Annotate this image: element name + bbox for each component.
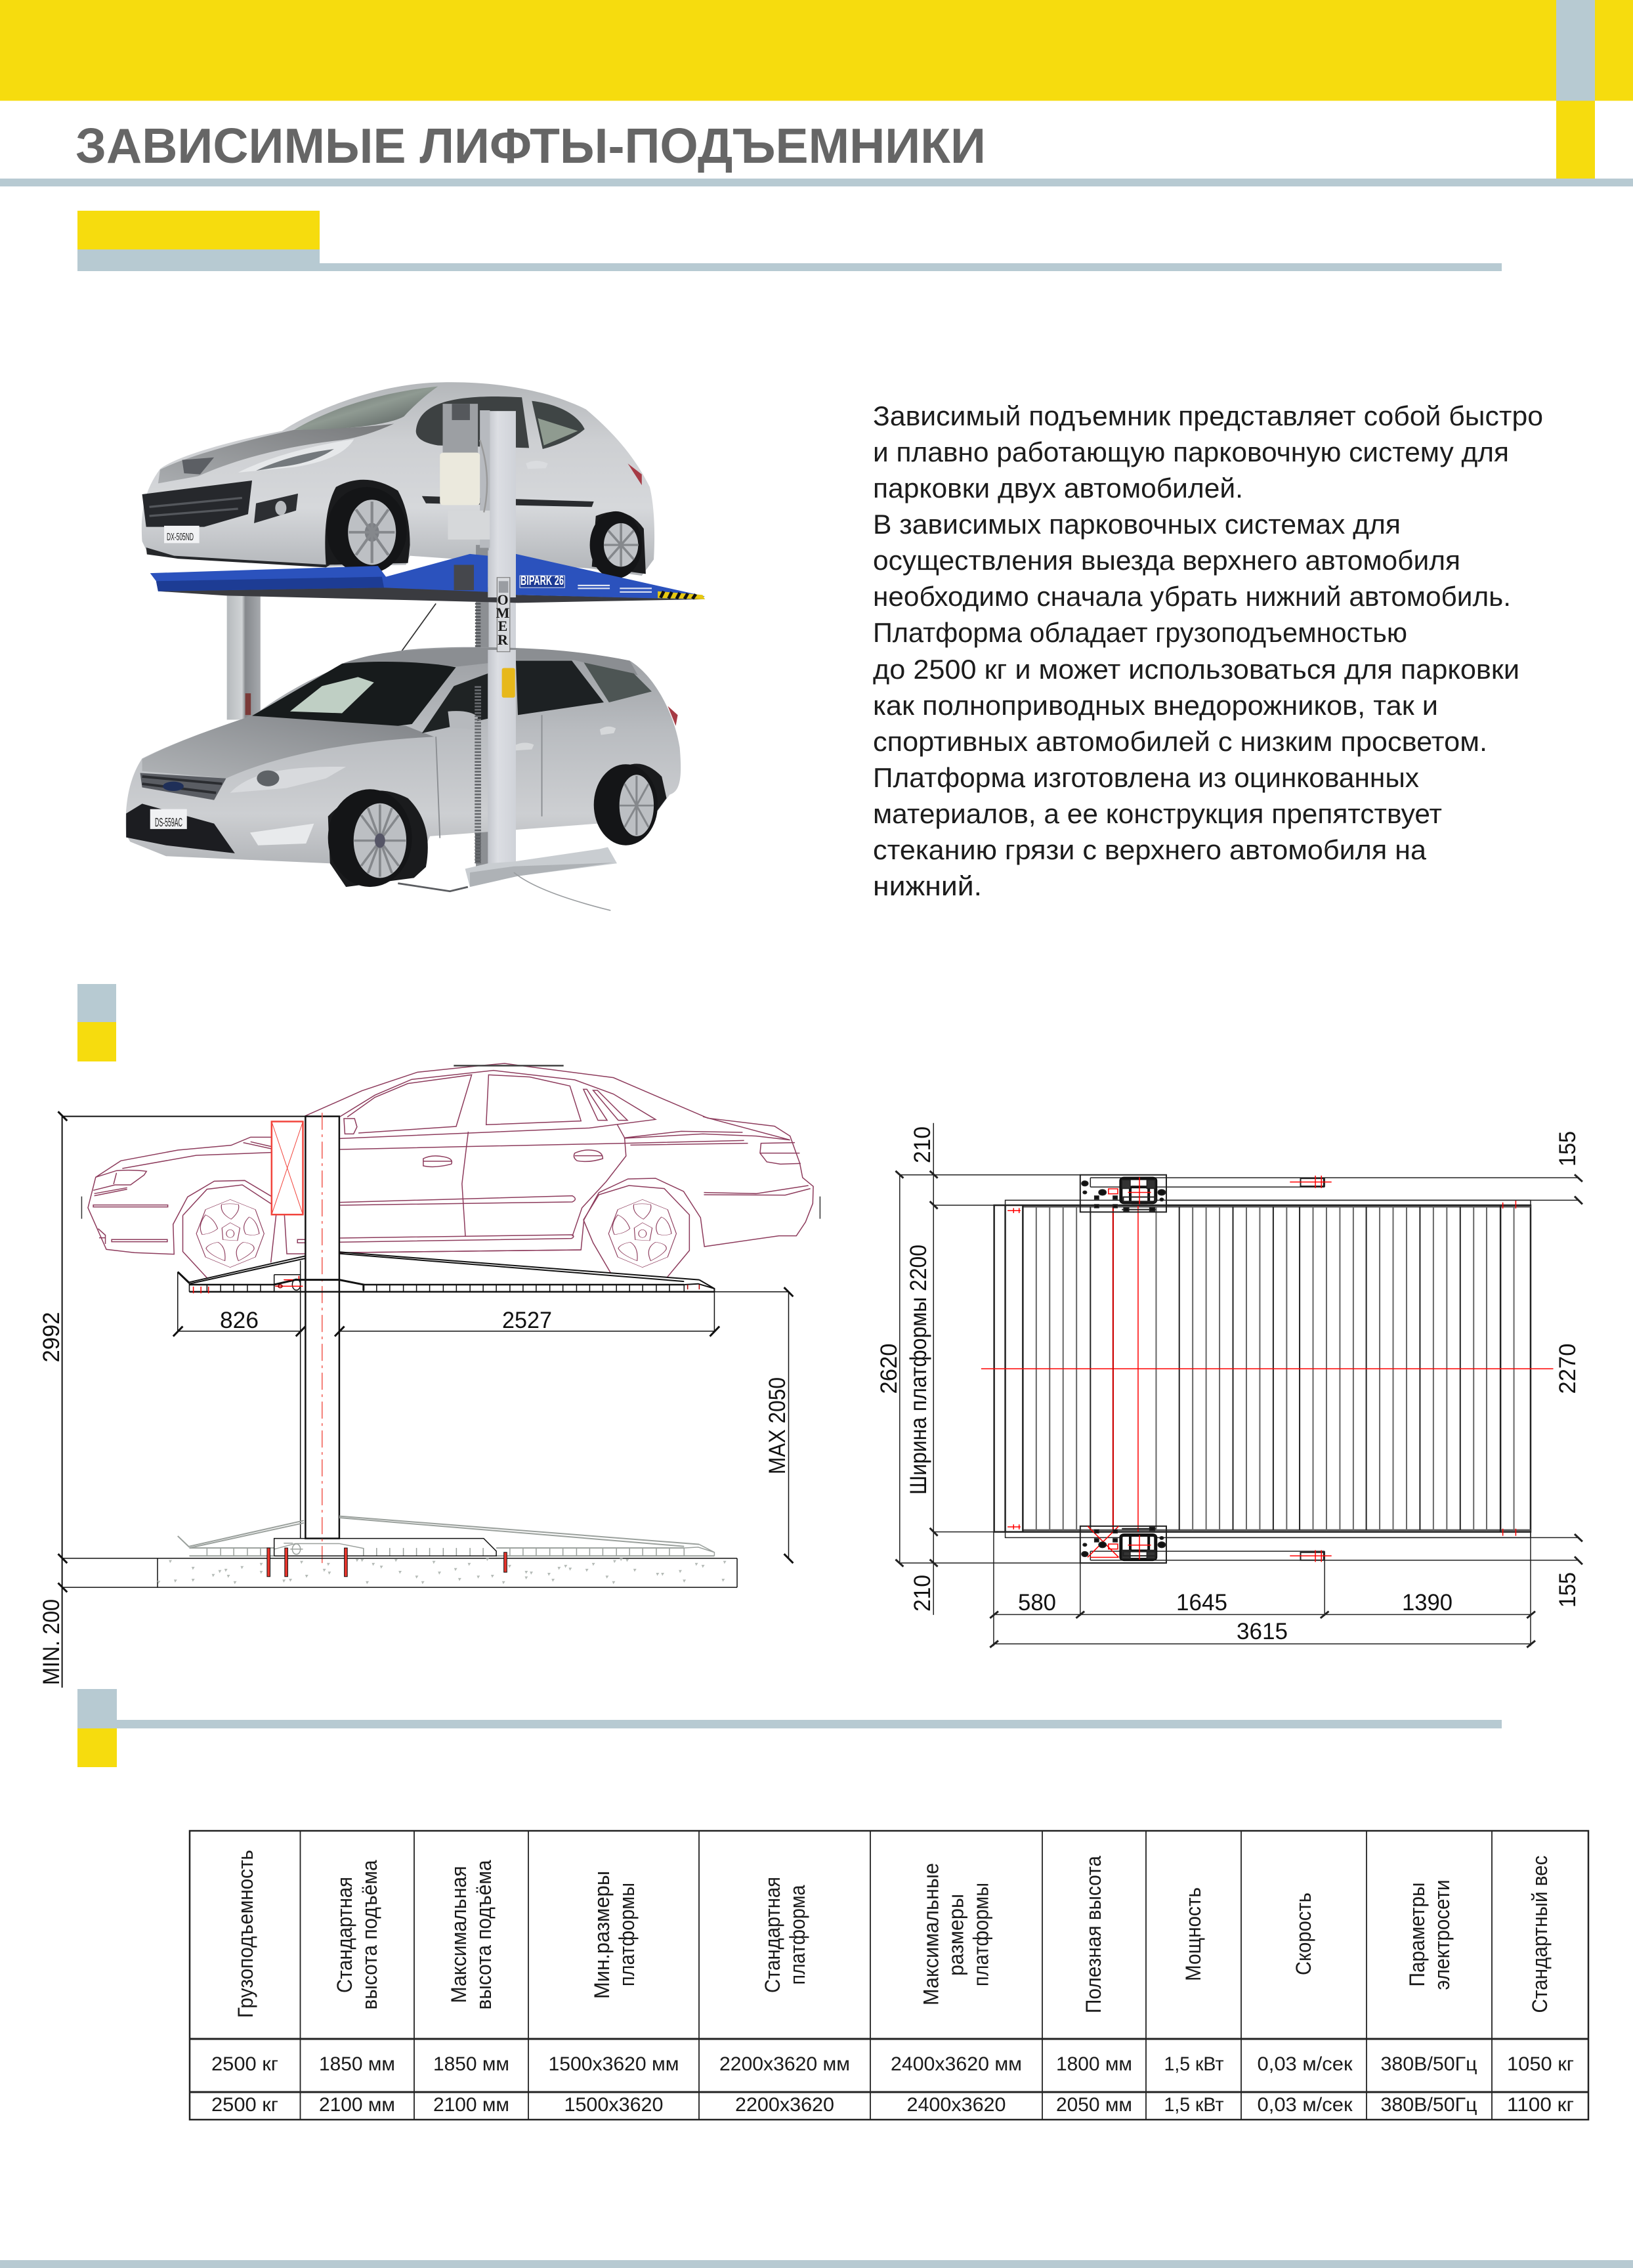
dimension: 2992: 2992: [39, 1312, 64, 1363]
table header labels: платформы: [615, 1883, 639, 1986]
dimension: 826: 826: [220, 1308, 259, 1333]
table header labels: платформа: [786, 1885, 809, 1985]
hoisting guard: [272, 1121, 303, 1214]
concrete aggregate: [158, 1558, 726, 1584]
top bracket: [1080, 1175, 1578, 1212]
section marker: drawings: [77, 984, 116, 1061]
table grid: [190, 1831, 1588, 2120]
description text: как полноприводных внедорожников, так и: [873, 690, 1438, 721]
table row 2: 2400x3620: [907, 2094, 1006, 2116]
table row 2: 2050 мм: [1056, 2094, 1132, 2116]
photo lettering: BIPARK 26: [520, 574, 564, 588]
dimension lines: [62, 1117, 305, 1688]
dimension: 155 bottom: 155: [1555, 1572, 1580, 1608]
photo: two-car parking lift: DS-559AC: [155, 816, 182, 829]
description text: осуществления выезда верхнего автомобиля: [873, 545, 1460, 576]
table row 1: 380В/50Гц: [1381, 2053, 1477, 2075]
table row 2: 0,03 м/сек: [1258, 2094, 1353, 2116]
dimension: 3615: 3615: [1237, 1619, 1288, 1644]
table header labels: Стандартная: [761, 1877, 784, 1993]
table header labels: высота подъёма: [472, 1860, 496, 2010]
dimension: 155 top: 155: [1555, 1131, 1580, 1166]
dimension: 580: 580: [1018, 1590, 1056, 1615]
dimension: MIN. 200: MIN. 200: [39, 1599, 64, 1685]
side elevation drawing: [39, 1063, 820, 1688]
table header labels: Грузоподъемность: [234, 1850, 257, 2018]
photo: two-car parking lift: M: [496, 605, 510, 621]
platform slats: [1036, 1207, 1514, 1530]
photo: two-car parking lift: E: [498, 618, 507, 634]
dimension: 2527: 2527: [502, 1308, 552, 1333]
table header labels: электросети: [1430, 1880, 1454, 1990]
platform outline: [994, 1200, 1531, 1537]
table header labels: [234, 1850, 1552, 2018]
bottom bracket: [1080, 1526, 1578, 1563]
table row 1: 1850 мм: [319, 2053, 395, 2075]
table row 2: 1100 кг: [1507, 2094, 1574, 2116]
table row 1: 1050 кг: [1507, 2053, 1574, 2075]
dimension: platform width 2200: Ширина платформы 2200: [906, 1245, 931, 1495]
table row 2: 2100 мм: [433, 2094, 509, 2116]
description text: В зависимых парковочных системах для: [873, 509, 1401, 540]
table header labels: платформы: [969, 1883, 992, 1986]
description text: необходимо сначала убрать нижний автомобиль.: [873, 581, 1511, 612]
dimension: MAX 2050: MAX 2050: [765, 1377, 790, 1474]
dimension: 2270: 2270: [1555, 1343, 1580, 1394]
column with power unit: [440, 404, 516, 874]
table header labels: Стандартная: [333, 1877, 356, 1993]
description text: Платформа изготовлена из оцинкованных: [873, 762, 1419, 793]
table header labels: Максимальная: [447, 1866, 471, 2003]
photo: two-car parking lift: [126, 382, 706, 910]
plan view drawing: [876, 1123, 1582, 1648]
rear post: [227, 595, 261, 719]
footer bar: [0, 2260, 1633, 2268]
description text: [873, 400, 1543, 901]
table header labels: Полезная высота: [1082, 1856, 1105, 2013]
table header labels: Мощность: [1181, 1887, 1205, 1981]
description text: Зависимый подъемник представляет собой быстро: [873, 400, 1543, 431]
table row 2: [211, 2094, 1574, 2116]
table row 1: 1850 мм: [433, 2053, 509, 2075]
dimension: 2620: 2620: [876, 1343, 902, 1394]
lift column and platforms: [58, 1111, 793, 1688]
dimension: 210 top: 210: [910, 1126, 935, 1163]
section marker: description: [77, 211, 1502, 271]
description text: до 2500 кг и может использоваться для парковки: [873, 654, 1519, 685]
base plate: [274, 1539, 496, 1556]
table row 2: 1,5 кВт: [1164, 2094, 1224, 2116]
upper car: [142, 382, 654, 578]
dimension: 210 bottom: 210: [910, 1575, 935, 1612]
table row 2: 2200x3620: [735, 2094, 834, 2116]
red axes: [981, 1206, 1554, 1531]
column front section and base: [398, 578, 617, 910]
photo: two-car parking lift: O: [497, 591, 509, 608]
lower platform: [178, 1516, 714, 1556]
table header labels: Скорость: [1292, 1893, 1315, 1975]
table header labels: высота подъёма: [358, 1860, 381, 2010]
photo: two-car parking lift: R: [498, 631, 509, 648]
lift wire: [400, 603, 436, 654]
photo: two-car parking lift: DX-505ND: [167, 532, 194, 543]
title: ЗАВИСИМЫЕ ЛИФТЫ-ПОДЪЕМНИКИ: [75, 118, 986, 173]
dimension lines: [900, 1123, 1578, 1615]
lower car: [126, 647, 681, 887]
car outline: [81, 1063, 820, 1278]
table header labels: размеры: [944, 1894, 967, 1976]
section marker: specifications: [77, 1689, 1502, 1767]
table row 1: 2200x3620 мм: [719, 2053, 850, 2075]
description text: стеканию грязи с верхнего автомобиля на: [873, 834, 1427, 865]
table row 2: 380В/50Гц: [1381, 2094, 1477, 2116]
description text: спортивных автомобилей с низким просветом.: [873, 726, 1487, 757]
table row 2: 1500x3620: [564, 2094, 663, 2116]
description text: и плавно работающую парковочную систему для: [873, 437, 1509, 467]
blue platform: [150, 550, 706, 603]
dimension: 1645: 1645: [1176, 1590, 1227, 1615]
dimension: 1390: 1390: [1402, 1590, 1453, 1615]
table row 1: 2400x3620 мм: [891, 2053, 1022, 2075]
table header labels: Параметры: [1405, 1883, 1429, 1986]
table header labels: Максимальные: [919, 1863, 943, 2005]
header band: [0, 0, 1633, 186]
table row 2: 2100 мм: [319, 2094, 395, 2116]
table header labels: Стандартный вес: [1528, 1855, 1552, 2013]
anchor bolts: [267, 1548, 507, 1577]
table row 1: 1800 мм: [1056, 2053, 1132, 2075]
table row 1: [211, 2053, 1574, 2075]
specifications table: [190, 1831, 1588, 2120]
description text: парковки двух автомобилей.: [873, 473, 1243, 503]
table header labels: Мин.размеры: [590, 1871, 614, 1999]
table row 1: 0,03 м/сек: [1258, 2053, 1353, 2075]
description text: Платформа обладает грузоподъемностью: [873, 617, 1407, 648]
upper platform: [178, 1252, 714, 1293]
table row 1: 1,5 кВт: [1164, 2053, 1224, 2075]
description text: нижний.: [873, 870, 982, 901]
description text: материалов, а ее конструкция препятствует: [873, 798, 1442, 829]
table row 2: 2500 кг: [211, 2094, 278, 2116]
table row 1: 2500 кг: [211, 2053, 278, 2075]
table row 1: 1500x3620 мм: [549, 2053, 679, 2075]
